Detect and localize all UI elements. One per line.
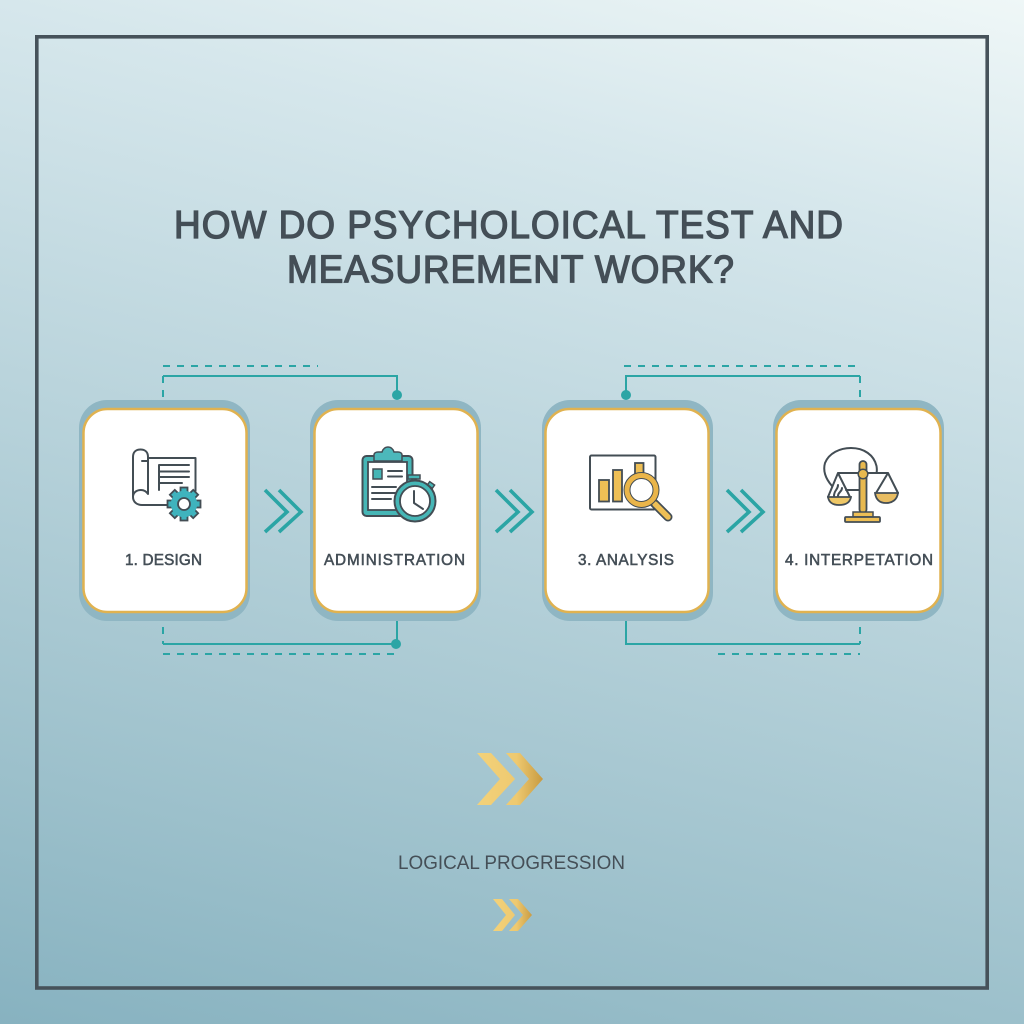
icon: bar chart and magnifier [590,456,668,517]
label: interpretation: 4. INTERPETATION [785,552,933,569]
icon: blueprint and gear [133,450,200,520]
panel: administration [310,400,481,621]
arrow: design to administration [265,490,301,532]
label: analysis: 3. ANALYSIS [578,552,674,569]
panel: analysis [542,400,713,621]
caption: logical progression: LOGICAL PROGRESSION [398,853,625,874]
arrow: administration to analysis [496,490,532,532]
icon: balance scale [824,448,898,522]
connectors: design to administration [163,366,402,654]
icon: large gold chevrons [477,753,543,805]
title: HOW DO PSYCHOLOICAL TEST AND [174,203,843,247]
icon: small gold chevrons [493,899,532,931]
title [174,203,843,292]
arrow: analysis to interpretation [727,490,763,532]
panel: interpretation [773,400,944,621]
label: 1. design: 1. DESIGN [125,552,202,569]
panel: design [79,400,250,621]
connectors: analysis to interpretation [621,366,860,654]
title: MEASUREMENT WORK? [287,248,734,292]
icon: clipboard and stopwatch [362,447,436,522]
label: administration: ADMINISTRATION [324,552,465,569]
